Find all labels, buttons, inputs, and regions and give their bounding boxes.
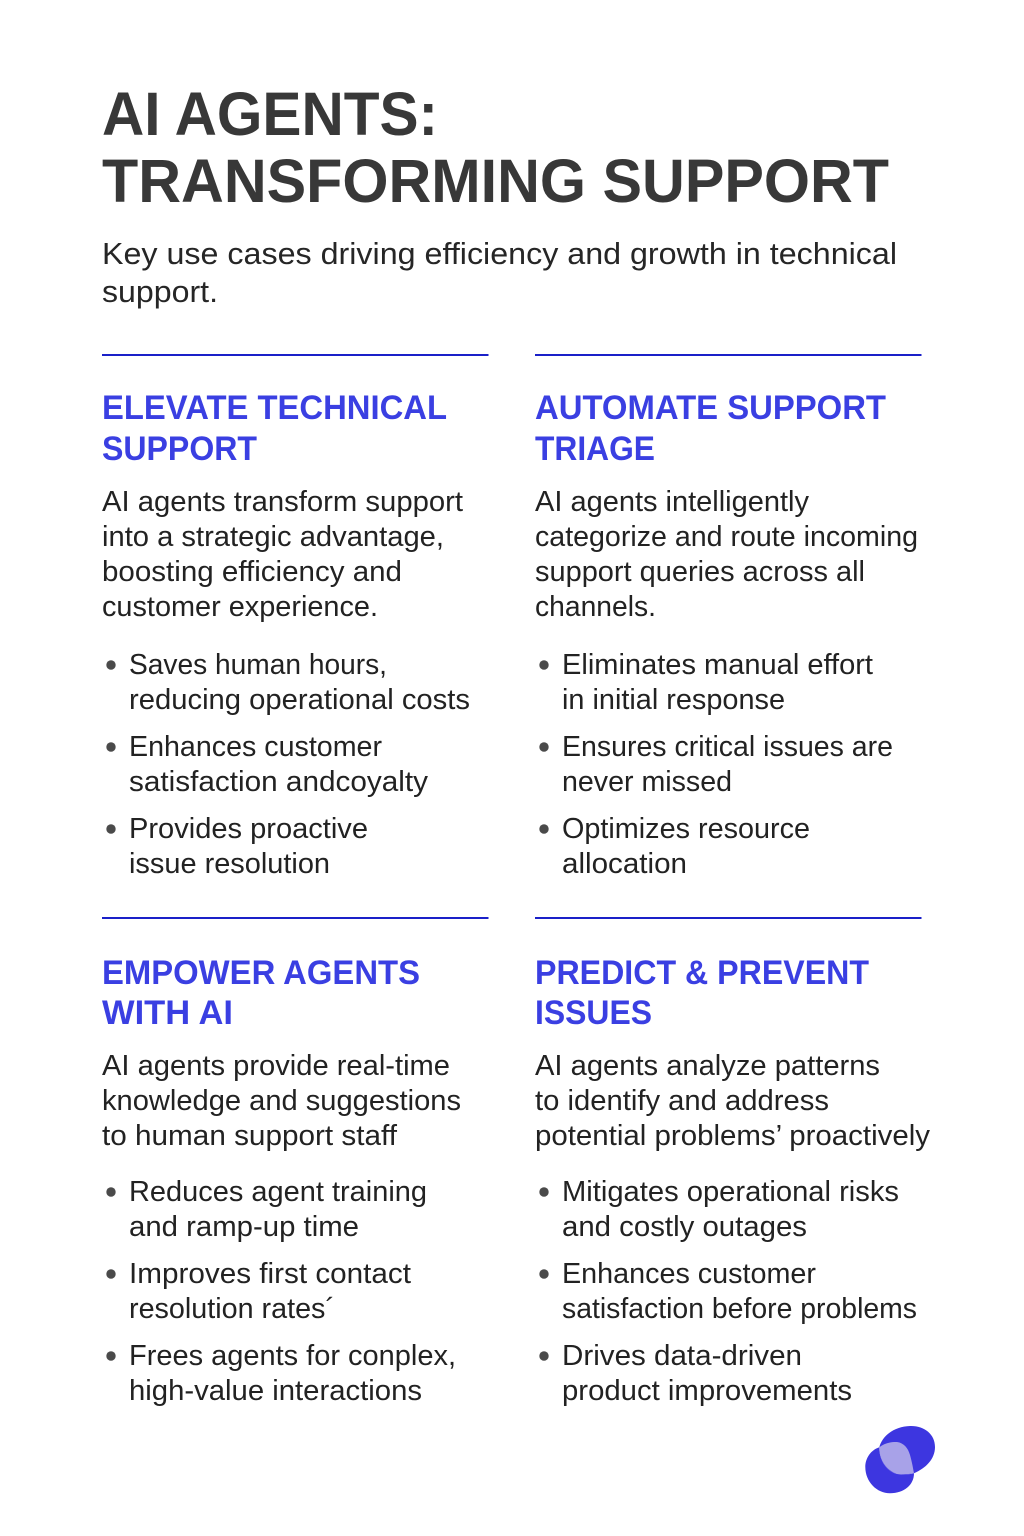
icon: overlapping blobs logo <box>865 1426 935 1493</box>
bullet list: empower benefits: resolution rates´ <box>129 1293 335 1325</box>
bullet list: predict benefits: and costly outages <box>562 1211 807 1243</box>
bullet list: automate benefits: allocation <box>562 848 687 880</box>
title <box>102 80 889 215</box>
text block: automate description: AI agents intelligently <box>535 486 809 518</box>
bullet list: predict benefits: Drives data-driven <box>562 1340 802 1372</box>
bullet list: empower benefits <box>106 1176 456 1407</box>
bullet list: predict benefits: product improvements <box>562 1375 852 1407</box>
subtitle <box>102 236 897 309</box>
bullet list: automate benefits: Ensures critical issues are <box>562 731 893 763</box>
heading: elevate technical support: SUPPORT <box>102 430 257 468</box>
heading: predict and prevent issues: PREDICT & PREVENT <box>535 954 869 992</box>
bullet list: empower benefits: Improves first contact <box>129 1258 411 1290</box>
text block: empower description: AI agents provide real-time <box>102 1050 450 1082</box>
heading: automate support triage: TRIAGE <box>535 430 655 468</box>
bullet list: predict benefits: Mitigates operational risks <box>562 1176 899 1208</box>
heading: predict and prevent issues: ISSUES <box>535 994 652 1032</box>
heading: empower agents with ai: EMPOWER AGENTS <box>102 954 420 992</box>
heading: automate support triage: AUTOMATE SUPPORT <box>535 389 886 427</box>
text block: automate description: support queries across all <box>535 556 865 588</box>
text block: elevate description: customer experience. <box>102 591 378 623</box>
heading: elevate technical support: ELEVATE TECHNICAL <box>102 389 447 427</box>
text block: automate description <box>535 486 918 623</box>
bullet list: empower benefits: Reduces agent training <box>129 1176 427 1208</box>
bullet list: predict benefits <box>539 1176 917 1407</box>
bullet list: automate benefits: never missed <box>562 766 732 798</box>
bullet list: elevate benefits <box>106 649 470 880</box>
heading: elevate technical support <box>102 389 447 468</box>
panel: automate support triage <box>535 354 922 880</box>
text block: automate description: channels. <box>535 591 656 623</box>
text block: empower description: to human support staff <box>102 1120 398 1152</box>
bullet list: elevate benefits: Saves human hours, <box>129 649 387 681</box>
text block: automate description: categorize and route incoming <box>535 521 918 553</box>
bullet list: predict benefits: satisfaction before problems <box>562 1293 917 1325</box>
text block: predict description: to identify and address <box>535 1085 829 1117</box>
title: TRANSFORMING SUPPORT <box>102 147 889 215</box>
bullet list: elevate benefits: Enhances customer <box>129 731 382 763</box>
panel: predict and prevent issues <box>535 917 930 1407</box>
bullet list: automate benefits: in initial response <box>562 684 785 716</box>
text block: predict description: AI agents analyze patterns <box>535 1050 880 1082</box>
bullet list: empower benefits: and ramp-up time <box>129 1211 359 1243</box>
bullet list: empower benefits: high-value interactions <box>129 1375 422 1407</box>
heading: predict and prevent issues <box>535 954 869 1032</box>
bullet list: automate benefits: Eliminates manual effort <box>562 649 873 681</box>
subtitle: Key use cases driving efficiency and growth in technical <box>102 236 897 271</box>
heading: empower agents with ai: WITH AI <box>102 994 233 1032</box>
bullet list: automate benefits: Optimizes resource <box>562 813 810 845</box>
text block: elevate description: AI agents transform support <box>102 486 463 518</box>
bullet list: elevate benefits: issue resolution <box>129 848 330 880</box>
text block: elevate description: into a strategic advantage, <box>102 521 444 553</box>
heading: automate support triage <box>535 389 886 468</box>
text block: predict description: potential problems’ proactively <box>535 1120 930 1152</box>
bullet list: predict benefits: Enhances customer <box>562 1258 816 1290</box>
text block: predict description <box>535 1050 930 1152</box>
title: AI AGENTS: <box>102 80 438 148</box>
bullet list: automate benefits <box>539 649 893 880</box>
text block: empower description <box>102 1050 461 1152</box>
heading: empower agents with ai <box>102 954 420 1032</box>
panel: elevate technical support <box>102 354 488 880</box>
panel: empower agents with ai <box>102 917 488 1407</box>
bullet list: empower benefits: Frees agents for conplex, <box>129 1340 456 1372</box>
text block: elevate description <box>102 486 463 623</box>
bullet list: elevate benefits: reducing operational costs <box>129 684 470 716</box>
text block: elevate description: boosting efficiency and <box>102 556 402 588</box>
subtitle: support. <box>102 274 218 309</box>
bullet list: elevate benefits: Provides proactive <box>129 813 368 845</box>
bullet list: elevate benefits: satisfaction andcoyalty <box>129 766 429 798</box>
text block: empower description: knowledge and suggestions <box>102 1085 461 1117</box>
